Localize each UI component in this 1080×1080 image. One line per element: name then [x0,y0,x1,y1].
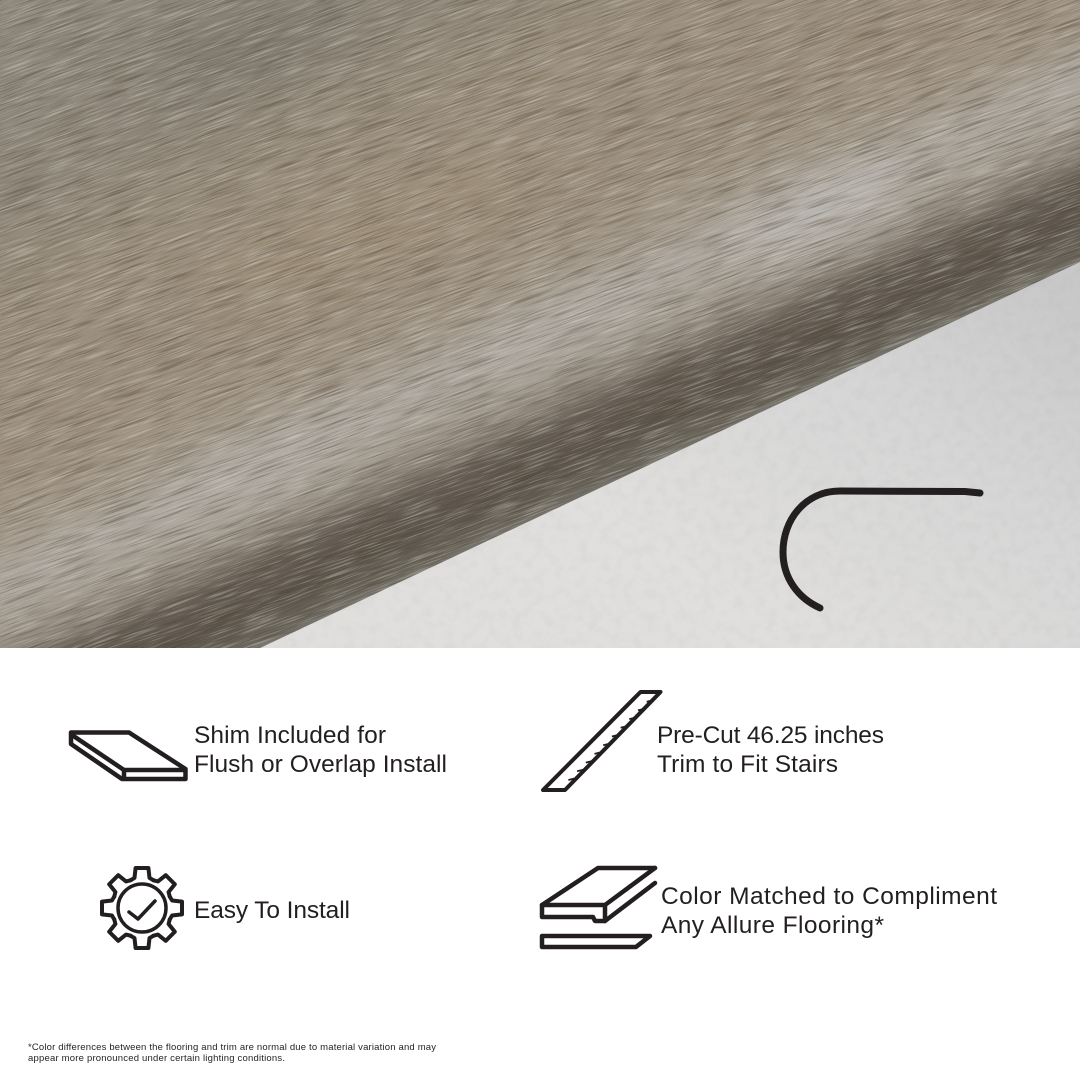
feature: pre-cut length [543,692,884,790]
concrete floor [260,262,1080,648]
text: pre-cut [657,722,884,778]
text: shim [194,722,447,778]
feature: color matched [542,868,997,947]
text: color matched: Color Matched to Compliment [661,883,997,910]
feature: easy to install [102,868,350,948]
text: shim: Shim Included for [194,722,386,749]
footnote [28,1042,436,1064]
profile icon: stair nose curve [783,491,980,608]
text: pre-cut: Pre-Cut 46.25 inches [657,722,884,749]
text: color matched: Any Allure Flooring* [661,912,884,939]
text: easy to install: Easy To Install [194,897,350,924]
text: color matched [661,883,997,939]
photo: stair nose wood trim on concrete [0,0,1080,648]
text: pre-cut: Trim to Fit Stairs [657,751,838,778]
icon: ruler [543,692,660,790]
wood plank surface [0,0,1080,648]
footnote: *Color differences between the flooring and trim are normal due to material variation and may [28,1042,436,1053]
text: shim: Flush or Overlap Install [194,751,447,778]
icon: trim piece and shim [542,868,655,947]
feature: shim included [71,722,447,779]
icon: shim board [71,732,186,779]
footnote: appear more pronounced under certain lighting conditions. [28,1053,285,1064]
icon: gear with check mark [102,868,182,948]
